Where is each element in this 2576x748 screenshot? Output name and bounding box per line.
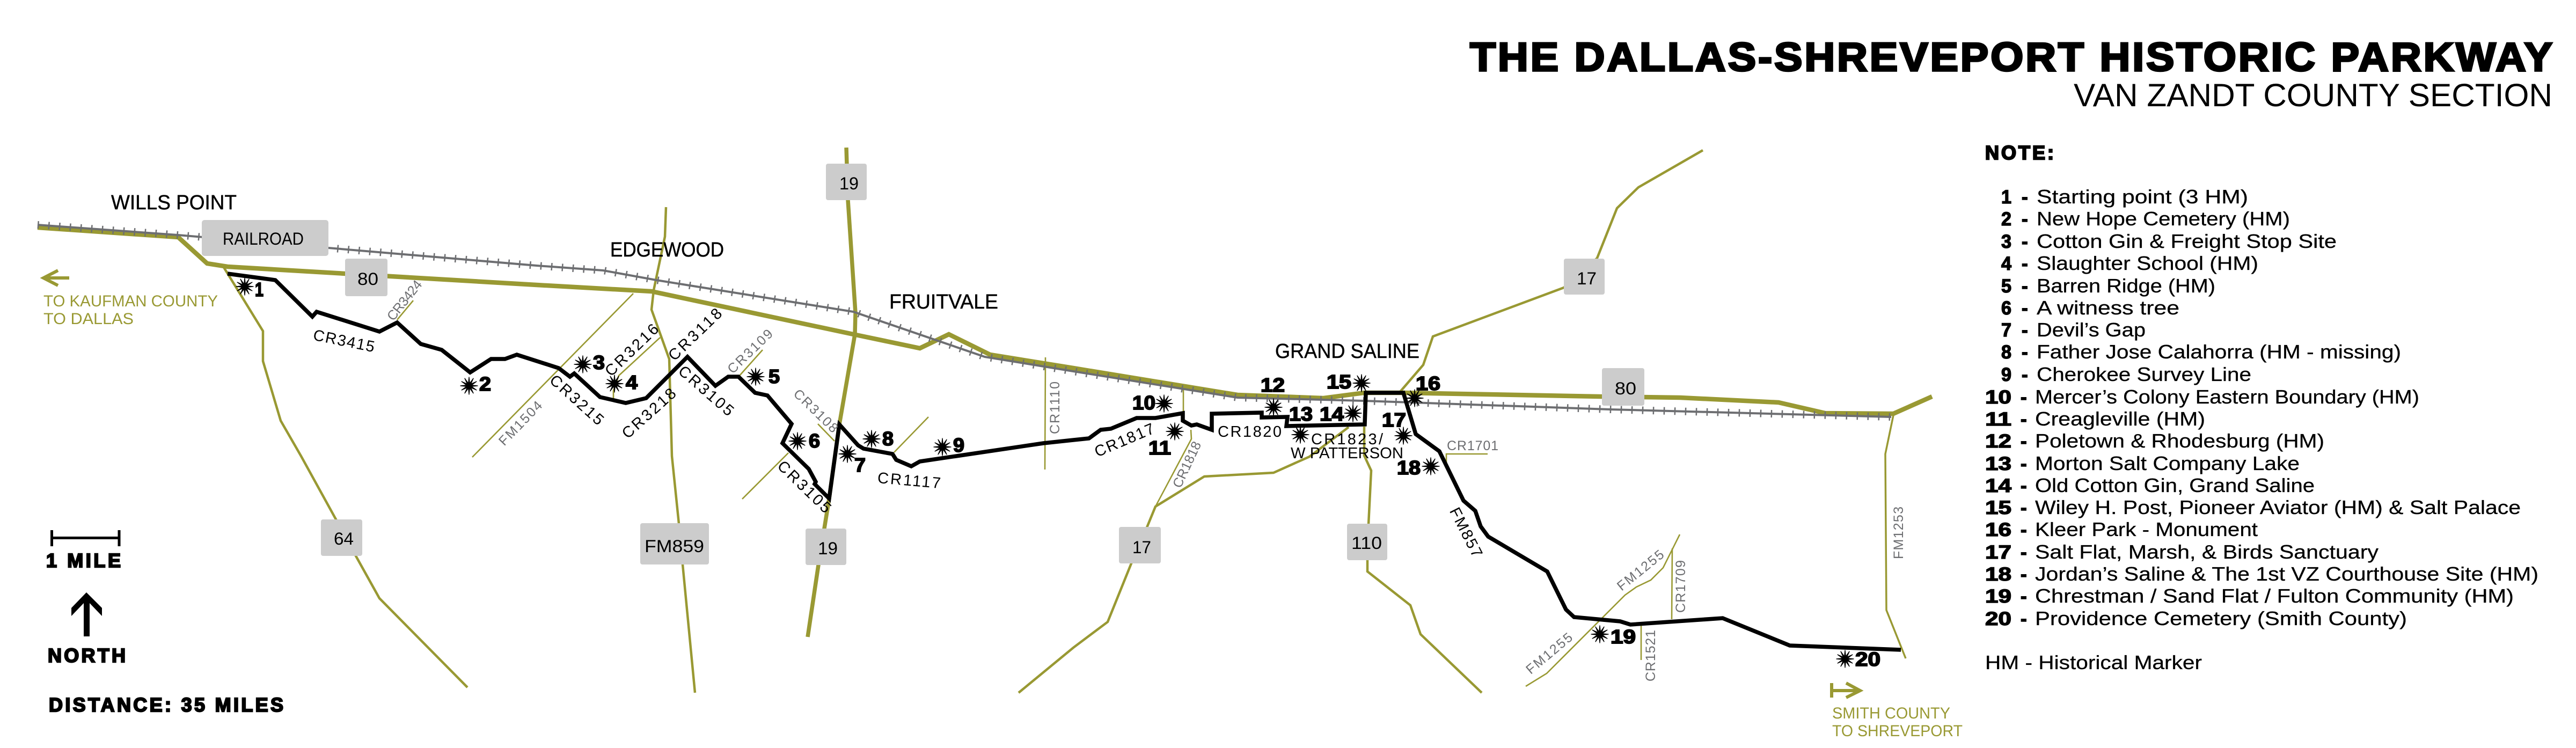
markers: [236, 278, 1880, 670]
legend item 10: 10: [1985, 387, 2011, 408]
legend item 6: A witness tree: [2037, 297, 2179, 319]
legend item 12: Poletown & Rhodesburg (HM): [2035, 430, 2324, 452]
label: CR1820: CR1820: [1218, 423, 1282, 441]
marker 18: [1397, 457, 1439, 479]
road: CR3109: [740, 350, 763, 376]
label: CR3218: CR3218: [619, 385, 679, 442]
marker 7: [838, 445, 866, 476]
road: CR1521: [1641, 625, 1642, 660]
marker 10: 10: [1132, 392, 1155, 414]
legend item 17: 17: [1985, 542, 2011, 563]
marker 8: 8: [882, 428, 894, 450]
marker 15: 15: [1327, 371, 1351, 393]
direction text: Smith County to Shreveport: [1832, 705, 1963, 740]
label: CR1817: CR1817: [1092, 420, 1157, 461]
marker 20: 20: [1855, 648, 1880, 670]
legend item 6: 6: [2001, 298, 2011, 319]
road: highway 110: [1364, 427, 1482, 693]
town: Wills Point: WILLS POINT: [111, 192, 237, 214]
legend item 16: Kleer Park - Monument: [2035, 518, 2258, 540]
marker 17: 17: [1382, 409, 1406, 431]
marker 15: [1327, 371, 1371, 393]
label: CR1709: CR1709: [1673, 560, 1688, 613]
marker 3: 3: [593, 351, 605, 373]
legend item 12: -: [2021, 431, 2027, 452]
label: CR3118: CR3118: [665, 305, 726, 364]
legend item 11: Creagleville (HM): [2035, 408, 2205, 430]
label: FM1253: FM1253: [1891, 507, 1906, 559]
railroad line: [38, 225, 1891, 417]
arrow: to Shreveport: [1832, 683, 1860, 698]
sign: FM859: [640, 523, 709, 564]
legend item 1: -: [2022, 187, 2028, 208]
legend item 8: Father Jose Calahorra (HM - missing): [2037, 341, 2401, 363]
marker 13: [1289, 403, 1313, 443]
legend item 17: Salt Flat, Marsh, & Birds Sanctuary: [2035, 541, 2379, 563]
marker 6: 6: [809, 430, 820, 452]
road: Mercer boundary line: [1183, 390, 1184, 413]
legend item 15: Wiley H. Post, Pioneer Aviator (HM) & Salt Palace: [2035, 496, 2521, 518]
marker 11: [1148, 423, 1184, 459]
marker 9: [934, 434, 964, 456]
legend item 9: Cherokee Survey Line: [2037, 363, 2251, 385]
marker 14: [1320, 403, 1362, 425]
marker 18: 18: [1397, 457, 1421, 479]
road: CR3108: [818, 424, 835, 441]
marker 5: [747, 365, 780, 387]
label: CR3216: CR3216: [602, 320, 662, 380]
label: CR1701: CR1701: [1447, 438, 1498, 453]
legend item 13: 13: [1985, 453, 2011, 474]
sign: highway 64: 64: [334, 529, 354, 548]
label: CR1117: CR1117: [877, 470, 941, 492]
legend: [1985, 142, 2538, 673]
legend item 13: Morton Salt Company Lake: [2035, 452, 2300, 474]
label: CR3424: CR3424: [384, 277, 425, 324]
label: CR1110: CR1110: [1048, 382, 1063, 434]
marker 19: 19: [1611, 626, 1636, 648]
legend item 18: 18: [1985, 564, 2011, 585]
legend item 12: 12: [1985, 431, 2011, 452]
legend item 6: -: [2022, 298, 2028, 319]
label: FM1255 upper: FM1255: [1614, 547, 1667, 594]
scale bar: [46, 530, 121, 571]
legend item 20: 20: [1985, 608, 2011, 629]
legend item 8: 8: [2001, 342, 2011, 363]
legend item 19: Chrestman / Sand Flat / Fulton Community (HM): [2035, 585, 2514, 607]
sign: highway 17 south: [1119, 527, 1161, 563]
marker 12: [1261, 374, 1285, 416]
marker 4: 4: [626, 371, 638, 393]
marker 3: [574, 351, 605, 373]
route: parkway black line: [228, 274, 1901, 650]
road: highway 17 south: [1019, 427, 1349, 693]
legend item 2: 2: [2001, 209, 2011, 230]
road: highway 17 north: [1400, 150, 1703, 392]
legend item 14: 14: [1985, 475, 2012, 496]
legend item 7: Devil’s Gap: [2037, 319, 2146, 341]
scale bar: 1 MILE: [46, 549, 121, 571]
subtitle: VAN ZANDT COUNTY SECTION: [2074, 77, 2552, 113]
legend item 18: -: [2021, 564, 2027, 585]
legend item 20: -: [2021, 608, 2027, 629]
road: CR3424: [397, 300, 413, 320]
sign: highway 80 east: [1602, 368, 1644, 406]
total distance: DISTANCE: 35 MILES: [49, 694, 283, 716]
label: CR1521: CR1521: [1643, 630, 1658, 681]
label: FM1504: FM1504: [496, 398, 545, 449]
sign: highway 17 north: 17: [1577, 269, 1597, 288]
legend item 5: Barren Ridge (HM): [2037, 275, 2215, 297]
legend item 1: Starting point (3 HM): [2037, 186, 2248, 208]
label: CR3105 north: CR3105: [675, 362, 737, 420]
road: CR1818: [1155, 430, 1191, 507]
legend item 15: 15: [1985, 497, 2011, 518]
legend item 16: -: [2021, 519, 2027, 540]
legend item 19: -: [2021, 586, 2027, 607]
road: FM1255: [1526, 534, 1680, 686]
legend item 11: -: [2021, 409, 2027, 430]
marker 14: 14: [1320, 403, 1344, 425]
legend item 7: 7: [2001, 320, 2011, 341]
legend item 20: Providence Cemetery (Smith County): [2035, 607, 2407, 629]
road: highway 64: [223, 266, 467, 687]
sign: highway 17 north: [1564, 259, 1605, 295]
sign: highway 19 south: [806, 529, 846, 565]
legend item 3: 3: [2001, 231, 2011, 252]
sign: highway 17 south: 17: [1132, 538, 1151, 557]
marker 10: [1132, 392, 1173, 414]
marker 16: [1406, 372, 1440, 407]
sign: highway 19 north: [826, 164, 867, 200]
road: highway 19: [808, 148, 855, 637]
label: CR3215: CR3215: [546, 371, 607, 429]
marker 8: [863, 428, 894, 450]
north arrow: [48, 592, 126, 666]
panel: map: [38, 148, 1963, 740]
marker 20: [1836, 648, 1880, 670]
label: CR1823 / W Patterson: [1291, 431, 1403, 462]
legend item 2: -: [2022, 209, 2028, 230]
label: FM857: FM857: [1446, 505, 1485, 560]
title: THE DALLAS-SHREVEPORT HISTORIC PARKWAY: [1470, 35, 2552, 80]
legend item 4: -: [2022, 253, 2028, 274]
north arrow: NORTH: [48, 644, 126, 666]
marker 6: [789, 430, 820, 452]
label: CR3109: CR3109: [724, 326, 776, 377]
road: FM1253: [1885, 415, 1906, 658]
legend heading: NOTE:: [1985, 142, 2054, 164]
legend item 4: 4: [2001, 253, 2012, 274]
marker 17: [1382, 409, 1413, 444]
town: Fruitvale: FRUITVALE: [889, 291, 998, 313]
arrow: to Dallas: [43, 270, 69, 285]
marker 4: [605, 371, 638, 393]
legend item 10: Mercer’s Colony Eastern Boundary (HM): [2035, 386, 2419, 408]
sign: highway 19 south: 19: [818, 539, 838, 558]
road: county roads: [397, 294, 1680, 686]
label: CR3108: CR3108: [791, 386, 841, 436]
direction text: Smith County to Shreveport: TO SHREVEPORT: [1832, 722, 1963, 740]
legend item 5: -: [2022, 276, 2028, 297]
road: CR3216: [613, 338, 660, 398]
road: FM859: [652, 207, 695, 693]
road: CR1701: [1446, 454, 1488, 464]
legend item 2: New Hope Cemetery (HM): [2037, 208, 2290, 230]
legend item 10: -: [2021, 387, 2027, 408]
marker 13: 13: [1289, 403, 1313, 425]
legend item 3: Cotton Gin & Freight Stop Site: [2037, 230, 2337, 252]
legend item 15: -: [2021, 497, 2027, 518]
road: highway 80: [38, 228, 1932, 414]
direction text: to Kaufman County and Dallas: [43, 292, 218, 328]
legend item 7: -: [2022, 320, 2028, 341]
marker 1: [236, 278, 264, 300]
legend item 3: -: [2022, 231, 2028, 252]
legend footnote: HM - Historical Marker: [1985, 651, 2202, 673]
sign: highway 110: 110: [1351, 533, 1382, 553]
sign: highway 80 west: [345, 259, 387, 296]
marker 19: [1591, 626, 1636, 648]
legend item 14: -: [2021, 475, 2027, 496]
marker 5: 5: [769, 365, 780, 387]
legend item 6: [2001, 297, 2179, 319]
legend item 16: 16: [1985, 519, 2011, 540]
marker 1: 1: [255, 278, 264, 300]
legend item 9: -: [2022, 364, 2028, 385]
legend item 13: -: [2021, 453, 2027, 474]
sign: highway 80 east: 80: [1615, 379, 1636, 398]
label: CR1823 / W Patterson: W PATTERSON: [1291, 445, 1403, 462]
legend item 4: Slaughter School (HM): [2037, 252, 2258, 274]
label: CR1823 / W Patterson: CR1823/: [1311, 431, 1384, 448]
legend item 19: 19: [1985, 586, 2011, 607]
direction text: Smith County to Shreveport: SMITH COUNTY: [1832, 705, 1950, 722]
sign: highway 110: [1347, 524, 1387, 560]
legend item 9: 9: [2001, 364, 2011, 385]
road: FM1504: [472, 294, 633, 457]
sign: highway 19 north: 19: [839, 174, 859, 193]
town: Grand Saline: GRAND SALINE: [1275, 340, 1419, 363]
marker 12: 12: [1261, 374, 1285, 396]
sign: highway 80 west: 80: [357, 269, 378, 289]
sign: railroad: [202, 220, 328, 256]
marker 11: 11: [1148, 437, 1171, 459]
marker 2: 2: [479, 373, 491, 395]
road labels: [312, 277, 1906, 681]
label: FM1255 lower: FM1255: [1523, 630, 1576, 677]
marker 16: 16: [1416, 372, 1440, 394]
legend item 1: 1: [2001, 187, 2011, 208]
direction text: to Kaufman County and Dallas: TO KAUFMAN COUNTY: [43, 292, 218, 310]
legend item 8: -: [2022, 342, 2028, 363]
label: CR1818: CR1818: [1170, 439, 1204, 490]
sign: FM859: FM859: [645, 537, 704, 556]
legend item 14: Old Cotton Gin, Grand Saline: [2035, 474, 2315, 496]
town: Edgewood: EDGEWOOD: [610, 239, 724, 261]
legend item 18: Jordan’s Saline & The 1st VZ Courthouse Site (HM): [2035, 563, 2538, 585]
legend item 17: -: [2021, 542, 2027, 563]
sign: railroad: RAILROAD: [223, 229, 304, 248]
marker 9: 9: [953, 434, 964, 456]
sign: highway 64: [321, 519, 362, 556]
marker 7: 7: [854, 454, 866, 476]
direction text: to Kaufman County and Dallas: TO DALLAS: [43, 310, 134, 328]
legend item 11: 11: [1985, 409, 2011, 430]
road: spur south of marker 6: [742, 453, 788, 499]
road: spur east of marker 8: [894, 417, 928, 452]
marker 2: [460, 373, 491, 395]
legend item 7: [2001, 319, 2146, 341]
legend item 5: 5: [2001, 276, 2011, 297]
label: CR3105 south: CR3105: [774, 457, 835, 517]
legend item 11: [1985, 408, 2205, 430]
label: CR3415: CR3415: [312, 327, 376, 356]
